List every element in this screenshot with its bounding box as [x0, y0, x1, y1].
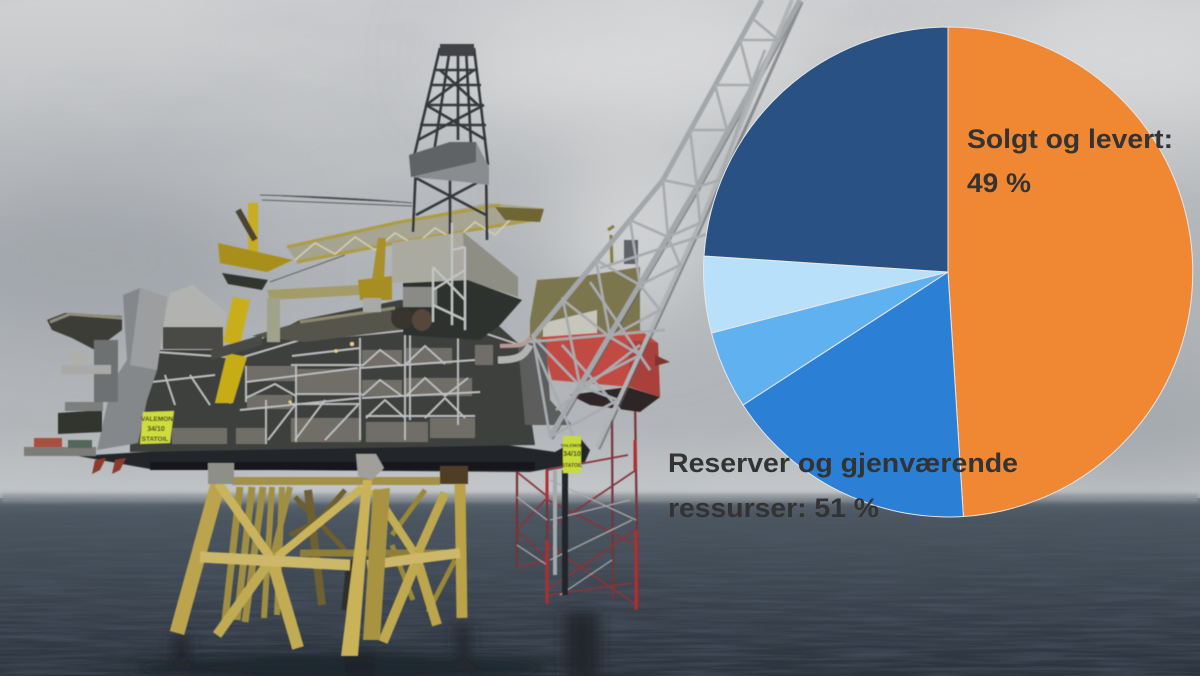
left living-quarters module: [24, 285, 227, 474]
platform underside deck: [78, 438, 590, 484]
label: sold and delivered: 49 %: [967, 168, 1031, 198]
yellow sign: Valemon left: STATOIL: [142, 436, 168, 443]
background: overcast sky: [0, 0, 1200, 500]
yellow sign: Valemon right: [561, 436, 583, 473]
label: reserves and remaining resources: Reserver og gjenværende: [668, 448, 1018, 478]
slice: other resources: [704, 256, 948, 333]
yellow sign: Valemon left: 34/10: [147, 426, 165, 433]
flare boom lattice: [530, 0, 802, 449]
right module with red box: [498, 226, 670, 425]
yellow sign: Valemon right: STATOIL: [562, 463, 582, 469]
derrick tower: [409, 44, 489, 240]
yellow jacket substructure: [177, 480, 462, 656]
slice: undiscovered resources: [704, 27, 948, 272]
drilling module block: [391, 223, 522, 340]
yellow sign: Valemon right: 34/10: [563, 451, 581, 458]
yellow crane pedestal and boom: [210, 195, 544, 403]
yellow sign: Valemon left: VALEMON: [141, 416, 173, 423]
label: reserves and remaining resources: [668, 448, 1018, 523]
slice: sold and delivered 49 %: [948, 27, 1193, 516]
yellow sign: Valemon right: VALEMON: [561, 443, 583, 448]
label: sold and delivered: Solgt og levert:: [967, 124, 1173, 154]
label: sold and delivered: [967, 124, 1173, 198]
pie chart: [704, 27, 1193, 517]
background: sea: [0, 494, 1200, 676]
label: reserves and remaining resources: ressurser: 51 %: [668, 493, 879, 523]
yellow sign: Valemon left: [140, 411, 174, 444]
slice: contingent resources: [712, 272, 948, 405]
slice: reserves: [743, 272, 963, 517]
red and white flare tower legs: [517, 400, 638, 610]
topsides modules: [130, 300, 535, 452]
oil platform photo illustration: [24, 0, 802, 656]
